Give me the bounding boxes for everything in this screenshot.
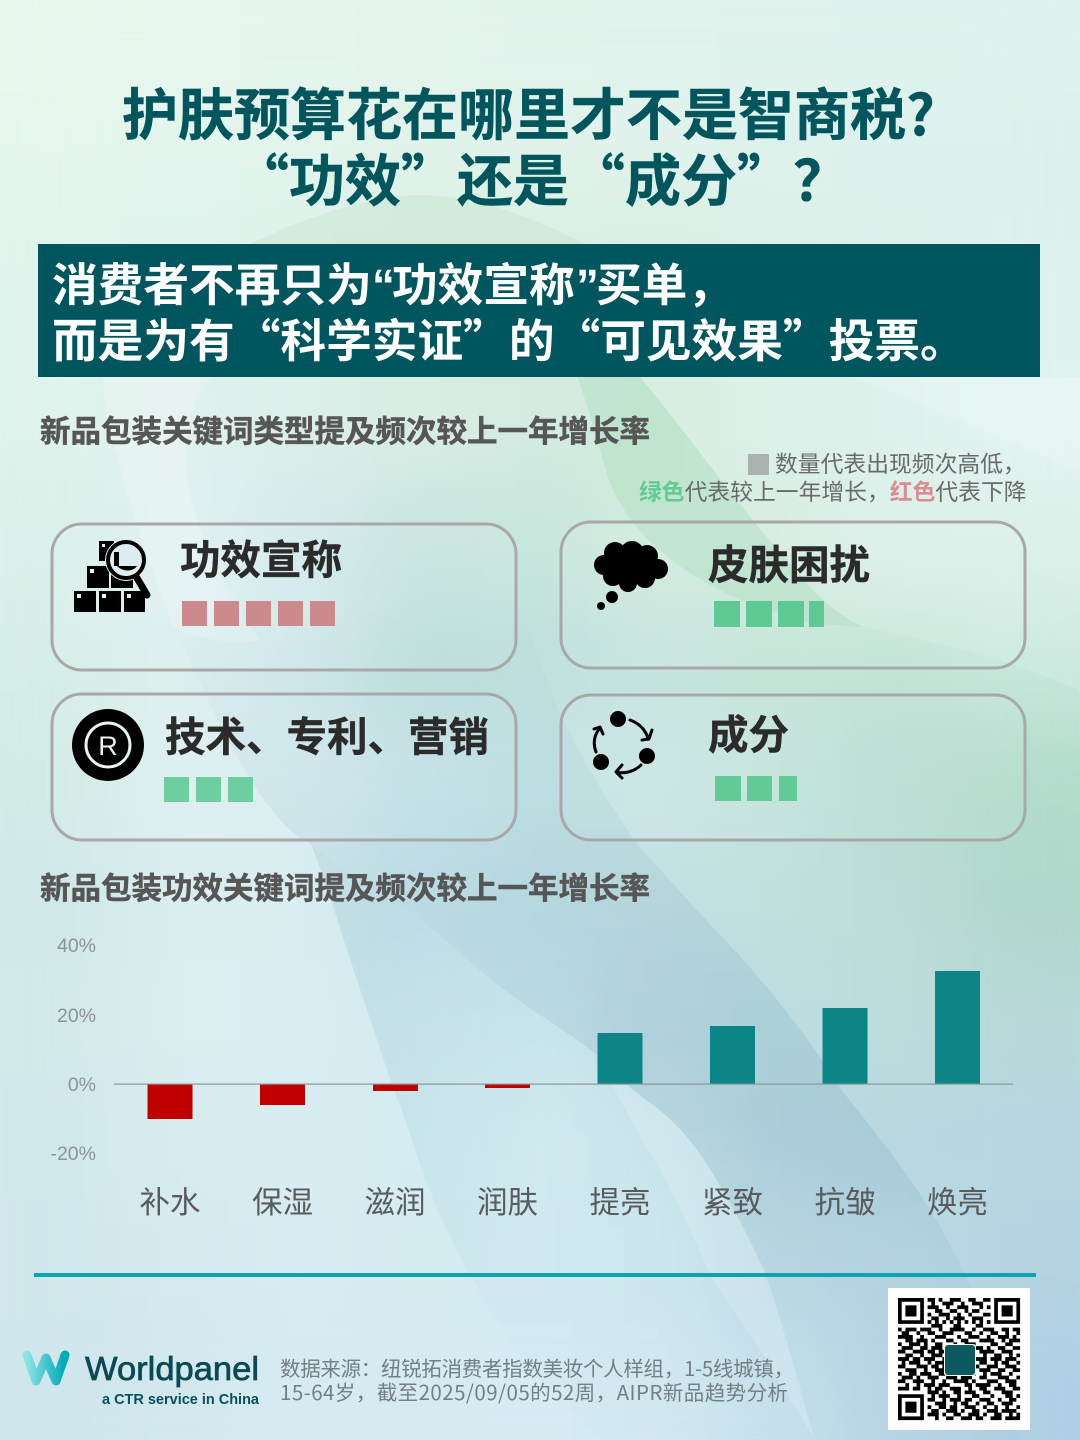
legend bbox=[639, 446, 1027, 507]
panel: 成分 bbox=[561, 695, 1025, 840]
icon: registered mark: R bbox=[98, 731, 118, 761]
category labels: 保湿 bbox=[252, 1178, 313, 1222]
title: 护肤预算花在哪里才不是智商税? bbox=[122, 71, 935, 152]
category labels: 润肤 bbox=[477, 1178, 538, 1222]
source note: 数据来源：纽锐拓消费者指数美妆个人样组，1-5线城镇， bbox=[280, 1352, 794, 1382]
y axis labels: 20% bbox=[57, 1005, 96, 1027]
source note: 15-64岁，截至2025/09/05的52周，AIPR新品趋势分析 bbox=[280, 1376, 788, 1406]
category labels: 紧致 bbox=[702, 1178, 763, 1222]
banner: key message bbox=[38, 244, 1040, 377]
y axis labels: 0% bbox=[68, 1074, 96, 1096]
indicator squares: 5 red bbox=[182, 601, 335, 626]
banner: key message: ” bbox=[576, 260, 599, 311]
category labels: 补水 bbox=[140, 1178, 200, 1222]
category labels bbox=[140, 1178, 988, 1222]
label: 成分: 成分 bbox=[708, 702, 789, 761]
panel: 技术、专利、营销 bbox=[52, 694, 516, 840]
banner: key message: “ bbox=[372, 260, 395, 311]
source note bbox=[280, 1352, 794, 1406]
title bbox=[122, 71, 935, 218]
banner: key message: 买单， bbox=[596, 249, 733, 315]
banner: key message: 而是为有“科学实证”的“可见效果”投票。 bbox=[52, 305, 966, 371]
bar chart bbox=[50, 935, 1013, 1222]
panel: 功效宣称 bbox=[52, 524, 516, 670]
logo: Worldpanel bbox=[27, 1350, 260, 1408]
legend: 绿色代表较上一年增长，红色代表下降 bbox=[639, 474, 1027, 507]
icon: boxes with magnifier bbox=[74, 539, 147, 612]
zero axis bbox=[114, 1084, 1013, 1085]
banner: key message: 功效宣称 bbox=[392, 249, 575, 315]
icon: cycle of three dots bbox=[593, 711, 655, 778]
QR code bbox=[888, 1288, 1030, 1430]
icon: thought cloud bbox=[594, 541, 668, 610]
logo: Worldpanel: Worldpanel bbox=[85, 1350, 259, 1387]
category labels: 抗皱 bbox=[814, 1178, 876, 1222]
heading: efficacy keywords: 新品包装功效关键词提及频次较上一年增长率 bbox=[40, 864, 650, 908]
category labels: 滋润 bbox=[364, 1178, 426, 1222]
label: 功效宣称: 功效宣称 bbox=[180, 527, 342, 586]
banner: key message: 消费者不再只为 bbox=[52, 249, 372, 315]
category labels: 提亮 bbox=[590, 1178, 650, 1222]
legend: 数量代表出现频次高低， bbox=[775, 446, 1026, 479]
label: 皮肤困扰: 皮肤困扰 bbox=[708, 532, 870, 591]
y axis labels bbox=[50, 935, 96, 1165]
icon: registered mark bbox=[72, 709, 144, 781]
negative bars bbox=[148, 1084, 530, 1119]
positive bars bbox=[598, 971, 980, 1084]
category labels: 焕亮 bbox=[927, 1178, 988, 1222]
y axis labels: -20% bbox=[50, 1143, 96, 1165]
y axis labels: 40% bbox=[57, 935, 96, 957]
indicator squares: 2.5 green bbox=[715, 776, 797, 801]
panel: 皮肤困扰 bbox=[561, 522, 1025, 668]
heading: keyword types: 新品包装关键词类型提及频次较上一年增长率 bbox=[40, 407, 650, 451]
title: “功效”还是“成分”？ bbox=[233, 137, 849, 218]
label: 技术、专利、营销: 技术、专利、营销 bbox=[165, 704, 489, 763]
logo: Worldpanel: a CTR service in China bbox=[102, 1391, 260, 1408]
indicator squares: 3 green bbox=[164, 777, 253, 802]
indicator squares: 3.5 green bbox=[714, 601, 824, 627]
